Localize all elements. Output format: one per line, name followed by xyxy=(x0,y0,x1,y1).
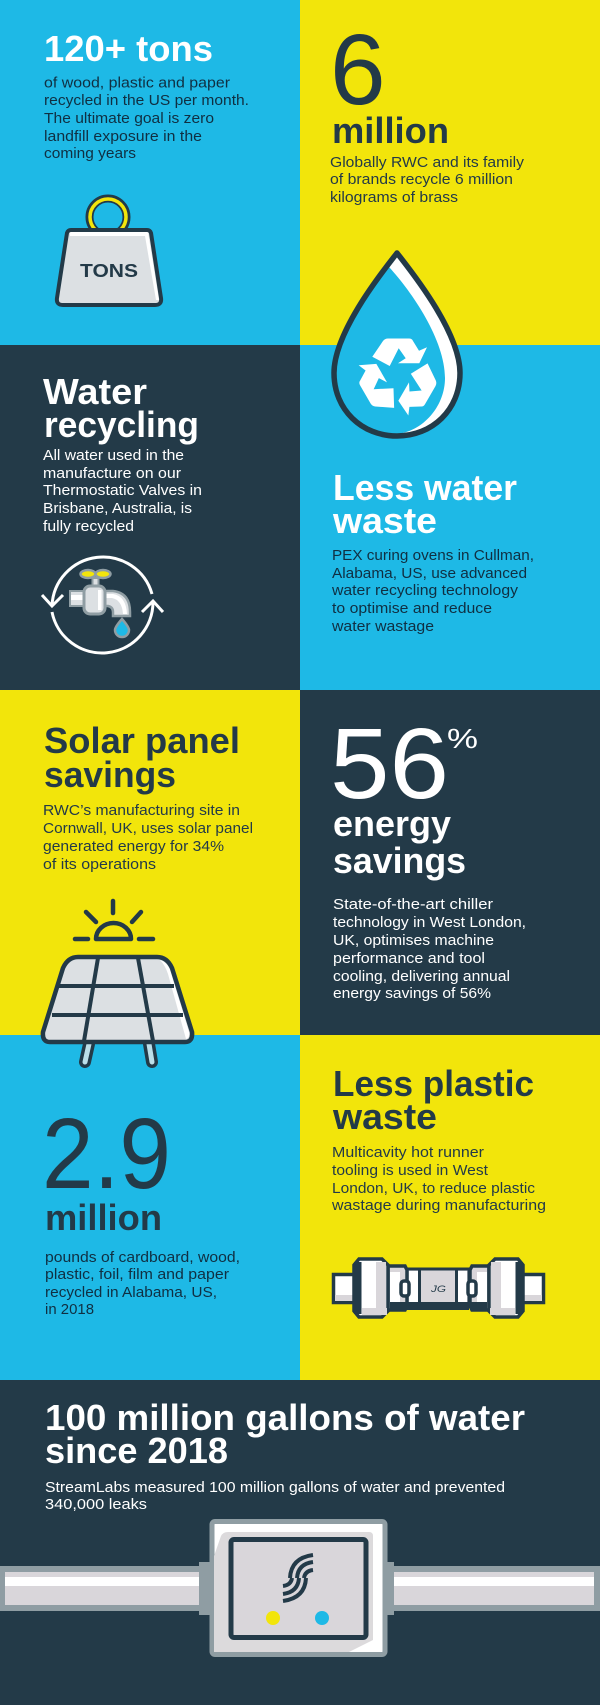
panel: 2.9 million xyxy=(0,1035,300,1380)
text: solar description: generated energy for 34% xyxy=(43,839,224,855)
panel: 56% energy savings xyxy=(300,690,600,1035)
text: tons description: of wood, plastic and paper xyxy=(44,76,230,92)
icon: water drop with recycling symbol xyxy=(334,253,460,436)
stat: 56 percent: % xyxy=(447,723,478,754)
icon: tons weight: TONS xyxy=(80,261,138,281)
heading: energy savings xyxy=(333,803,466,881)
text: energy description xyxy=(333,897,526,1002)
stat: 56 percent: 56 xyxy=(330,708,449,820)
text: energy description: technology in West London, xyxy=(333,915,526,931)
heading: less plastic waste xyxy=(332,1063,534,1137)
text: tons description: coming years xyxy=(44,146,136,162)
left pipe xyxy=(0,1566,199,1611)
icon: pipe fitting: JG xyxy=(430,1284,446,1294)
text: StreamLabs description: StreamLabs measured 100 million gallons of water and prevented xyxy=(45,1480,505,1496)
text: energy description: cooling, delivering annual xyxy=(333,969,510,985)
solar array xyxy=(43,957,192,1042)
heading: solar panel savings: Solar panel xyxy=(44,720,240,761)
text: tons description: recycled in the US per month. xyxy=(44,93,249,109)
text: water recycling description: Brisbane, Australia, is xyxy=(43,501,192,517)
heading: million: million xyxy=(332,110,449,151)
heading: water recycling xyxy=(43,371,199,445)
text: cardboard description: recycled in Alabama, US, xyxy=(45,1285,217,1301)
text: energy description: energy savings of 56% xyxy=(333,986,491,1002)
recycling arrows xyxy=(351,338,443,420)
text: cardboard description: plastic, foil, film and paper xyxy=(45,1267,229,1283)
text: water waste description: Alabama, US, use advanced xyxy=(332,566,527,582)
icon: tons weight xyxy=(57,198,161,305)
text: water recycling description: Thermostatic Valves in xyxy=(43,483,202,499)
text: cardboard description: in 2018 xyxy=(45,1302,94,1318)
text: water waste description: water wastage xyxy=(331,619,434,635)
heading: 120+ tons: 120+ tons xyxy=(44,28,213,69)
text: StreamLabs description xyxy=(45,1480,505,1513)
heading: less plastic waste: Less plastic xyxy=(333,1063,534,1104)
heading: water recycling: recycling xyxy=(44,404,199,445)
text: tons description: landfill exposure in the xyxy=(44,129,202,145)
heading: energy savings: savings xyxy=(333,840,466,881)
panel: 6 million xyxy=(300,0,600,345)
text: brass description: Globally RWC and its family xyxy=(330,155,525,171)
left half of fitting xyxy=(334,1259,409,1317)
heading: 100 million gallons: 100 million gallons of water xyxy=(45,1397,525,1438)
text: water waste description xyxy=(331,548,534,635)
text: plastic description: London, UK, to reduce plastic xyxy=(332,1181,535,1197)
text: tons description: The ultimate goal is zero xyxy=(44,111,214,127)
sun xyxy=(75,901,153,939)
text: plastic description xyxy=(331,1145,546,1214)
text: cardboard description: pounds of cardboard, wood, xyxy=(45,1250,240,1266)
text: water recycling description: manufacture on our xyxy=(43,466,181,482)
text: tons description xyxy=(44,76,249,162)
panel: 100 million gallons xyxy=(0,1380,600,1705)
text: brass description: of brands recycle 6 million xyxy=(330,172,513,188)
panel: 120+ tons xyxy=(0,0,300,345)
text: solar description xyxy=(43,803,253,873)
panel: solar panel savings xyxy=(0,690,300,1035)
heading: less water waste: Less water xyxy=(333,467,517,508)
text: energy description: performance and tool xyxy=(333,951,485,967)
panel: less plastic waste xyxy=(300,1035,600,1380)
text: solar description: of its operations xyxy=(43,857,156,873)
text: water recycling description xyxy=(43,448,202,535)
heading: less water waste xyxy=(332,467,517,541)
text: water waste description: to optimise and reduce xyxy=(332,601,492,617)
right pipe xyxy=(394,1566,600,1611)
text: cardboard description xyxy=(45,1250,240,1318)
heading: less water waste: waste xyxy=(332,500,437,541)
icon: StreamLabs device on pipe xyxy=(0,1522,600,1654)
text: solar description: Cornwall, UK, uses solar panel xyxy=(43,821,253,837)
right half of fitting xyxy=(468,1259,544,1317)
StreamLabs logo xyxy=(283,1555,313,1601)
panel: water recycling xyxy=(0,345,300,690)
heading: solar panel savings xyxy=(44,720,240,795)
text: brass description xyxy=(330,155,525,206)
text: water recycling description: fully recycled xyxy=(43,519,134,535)
text: StreamLabs description: 340,000 leaks xyxy=(45,1497,147,1513)
heading: water recycling: Water xyxy=(43,371,147,412)
text: brass description: kilograms of brass xyxy=(330,190,458,206)
text: plastic description: wastage during manufacturing xyxy=(331,1198,546,1214)
heading: energy savings: energy xyxy=(333,803,451,844)
icon: pipe fitting xyxy=(334,1259,544,1317)
heading: 100 million gallons: since 2018 xyxy=(45,1430,228,1471)
text: plastic description: Multicavity hot runner xyxy=(332,1145,484,1161)
heading: solar panel savings: savings xyxy=(44,754,176,795)
stat: 6: 6 xyxy=(330,14,386,126)
text: energy description: State-of-the-art chiller xyxy=(333,897,493,913)
stat: 2.9: 2.9 xyxy=(42,1098,171,1210)
text: plastic description: tooling is used in West xyxy=(332,1163,488,1179)
heading: million: million xyxy=(45,1197,162,1238)
heading: less plastic waste: waste xyxy=(332,1096,437,1137)
icon: solar panel with sun xyxy=(43,901,192,1062)
icon: tap with recycling arrows xyxy=(42,557,163,653)
text: solar description: RWC’s manufacturing site in xyxy=(43,803,240,819)
text: water waste description: PEX curing ovens in Cullman, xyxy=(332,548,534,564)
heading: 100 million gallons xyxy=(45,1397,525,1471)
panel: less water waste xyxy=(300,345,600,690)
text: water recycling description: All water used in the xyxy=(43,448,184,464)
panel legs xyxy=(85,1044,152,1062)
text: water waste description: water recycling technology xyxy=(331,583,519,599)
text: energy description: UK, optimises machine xyxy=(333,933,494,949)
